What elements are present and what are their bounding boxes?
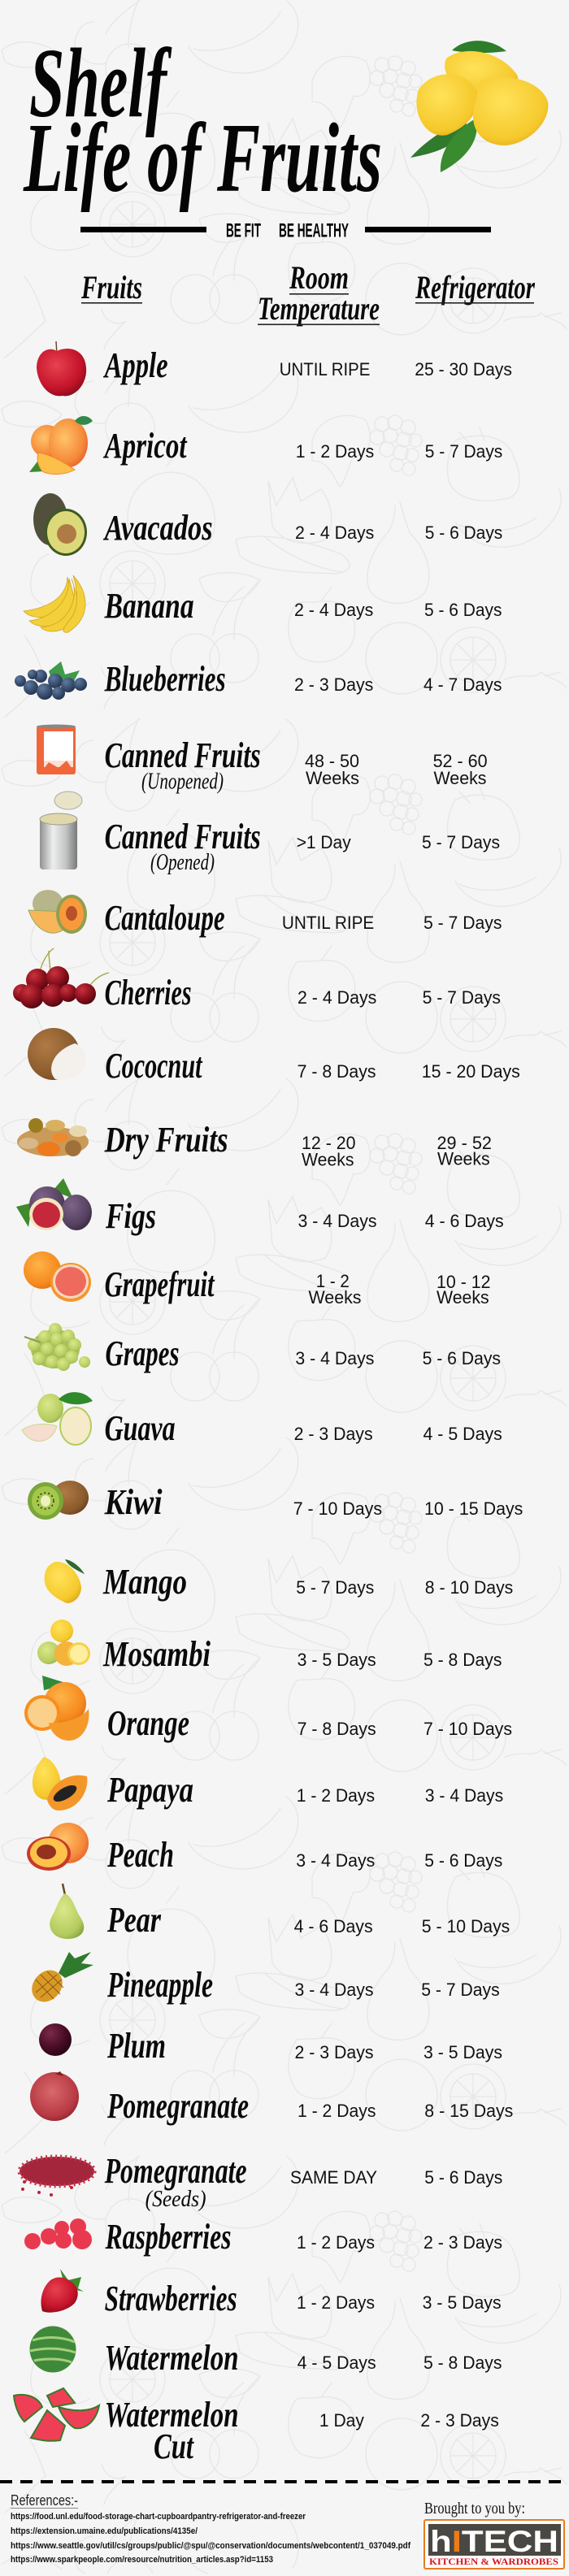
row: plum — [39, 2023, 502, 2066]
row: apple: 25 - 30 Days — [415, 359, 512, 379]
icon: peach — [27, 1823, 89, 1871]
row: banana — [24, 575, 502, 632]
row: coconut: Cococnut — [106, 1046, 203, 1086]
icon: grapefruit — [24, 1251, 91, 1302]
row: cherries: Cherries — [105, 973, 192, 1013]
row: mosambi: 3 - 5 Days — [298, 1650, 376, 1670]
row: dry fruits: 29 - 52 — [437, 1133, 492, 1153]
row: grapefruit: Grapefruit — [105, 1264, 215, 1304]
row: canned fruits opened: Canned Fruits — [105, 817, 261, 856]
column heading: room temperature: Room — [289, 259, 349, 296]
row: raspberries: 2 - 3 Days — [423, 2232, 502, 2253]
row: cherries: 2 - 4 Days — [298, 987, 376, 1008]
row: canned fruits unopened: (Unopened) — [141, 769, 224, 795]
row: pomegranate seeds: SAME DAY — [290, 2167, 377, 2188]
row: watermelon cut: 2 - 3 Days — [420, 2410, 499, 2431]
row: watermelon: 5 - 8 Days — [423, 2353, 502, 2373]
row: figs: Figs — [105, 1196, 156, 1236]
row: pear: 4 - 6 Days — [294, 1916, 373, 1936]
references: References:- — [11, 2492, 78, 2509]
icon: opened can — [40, 791, 82, 870]
row: orange: Orange — [107, 1703, 189, 1743]
row: guava: Guava — [105, 1408, 176, 1448]
icon: mosambi — [37, 1620, 90, 1666]
row: coconut: 15 - 20 Days — [422, 1061, 520, 1082]
references — [11, 2492, 410, 2565]
row: mosambi: 5 - 8 Days — [423, 1650, 502, 1670]
row: peach — [27, 1823, 502, 1875]
row: canned fruits unopened: Weeks — [306, 768, 359, 788]
title — [23, 28, 382, 213]
row: pomegranate seeds: Pomegranate — [104, 2151, 247, 2191]
logo: hitech: hITECH — [430, 2525, 558, 2558]
row: peach: 3 - 4 Days — [296, 1850, 375, 1871]
row: banana: Banana — [104, 586, 194, 626]
references: https://www.seattle.gov/util/cs/groups/public/@spu/@conservation/documents/webcontent/1_037049.pdf — [11, 2541, 410, 2551]
row: pomegranate seeds: 5 - 6 Days — [424, 2167, 502, 2188]
icon: orange — [24, 1676, 89, 1741]
row: coconut — [28, 1028, 520, 1086]
row: dry fruits — [17, 1118, 492, 1170]
brought to you by: Brought to you by: — [424, 2500, 525, 2517]
row: canned fruits opened: >1 Day — [297, 832, 351, 852]
icon: sealed can — [37, 725, 76, 774]
row: blueberries: 2 - 3 Days — [294, 674, 373, 695]
row: raspberries: 1 - 2 Days — [297, 2232, 375, 2253]
row: pineapple — [25, 1952, 500, 2008]
row: apple: Apple — [102, 345, 168, 385]
row: kiwi: Kiwi — [104, 1482, 163, 1522]
row: watermelon cut — [14, 2388, 499, 2466]
row: guava: 4 - 5 Days — [423, 1424, 502, 1444]
icon: apple — [37, 341, 86, 396]
row: guava: 2 - 3 Days — [294, 1424, 373, 1444]
column heading: room temperature — [258, 259, 380, 327]
icon: dry fruits — [17, 1118, 89, 1156]
icon: papaya — [33, 1757, 87, 1811]
row: grapefruit: 10 - 12 — [437, 1272, 491, 1292]
row: apricot: 1 - 2 Days — [296, 441, 374, 462]
row: grapefruit: Weeks — [309, 1287, 361, 1308]
icon: avocado — [33, 493, 87, 556]
row: canned fruits unopened: 48 - 50 — [305, 751, 359, 771]
row: orange: 7 - 10 Days — [423, 1719, 512, 1739]
references: https://food.unl.edu/food-storage-chart-cupboardpantry-refrigerator-and-freezer — [11, 2512, 306, 2522]
row: coconut: 7 - 8 Days — [298, 1061, 376, 1082]
row: avocados: 5 - 6 Days — [425, 523, 502, 543]
row: apricot: 5 - 7 Days — [425, 441, 502, 462]
row: papaya — [33, 1757, 503, 1811]
row: dry fruits: Dry Fruits — [104, 1120, 228, 1160]
row: cherries — [13, 948, 501, 1013]
row: mosambi — [37, 1620, 502, 1674]
title: Life of Fruits — [23, 103, 382, 213]
title: Shelf — [29, 28, 172, 138]
row: canned fruits unopened: 52 - 60 — [433, 751, 488, 771]
icon: green grapes — [24, 1323, 90, 1371]
icon: pear — [50, 1884, 84, 1939]
row: papaya: 3 - 4 Days — [425, 1785, 503, 1806]
row: pineapple: 5 - 7 Days — [421, 1980, 500, 2000]
row: papaya: 1 - 2 Days — [297, 1785, 375, 1806]
row: blueberries: 4 - 7 Days — [423, 674, 502, 695]
row: kiwi — [28, 1481, 523, 1522]
icon: cherries — [13, 948, 109, 1008]
icon: pomegranate — [30, 2071, 79, 2121]
row: dry fruits: Weeks — [302, 1149, 354, 1170]
row: canned fruits opened — [40, 791, 500, 875]
row: canned fruits opened: (Opened) — [150, 850, 215, 875]
row: watermelon cut: Cut — [154, 2426, 194, 2466]
row: banana: 2 - 4 Days — [294, 600, 373, 620]
row: figs — [16, 1178, 504, 1236]
row: pomegranate seeds: (Seeds) — [146, 2187, 206, 2212]
row: blueberries: Blueberries — [104, 659, 226, 699]
row: pear: Pear — [106, 1900, 162, 1940]
tagline with rules: BE FIT — [226, 219, 261, 242]
icon: mango — [45, 1559, 85, 1603]
row: cantaloupe: UNTIL RIPE — [282, 913, 374, 933]
row: guava — [22, 1392, 502, 1448]
row: raspberries — [24, 2217, 502, 2257]
icon: watermelon wedges — [14, 2388, 99, 2441]
row: canned fruits unopened — [37, 725, 488, 795]
row: pomegranate: 1 - 2 Days — [298, 2101, 376, 2121]
row: dry fruits: Weeks — [437, 1149, 490, 1169]
row: kiwi: 7 - 10 Days — [293, 1498, 382, 1519]
row: peach: 5 - 6 Days — [424, 1850, 502, 1871]
row: watermelon — [29, 2326, 502, 2378]
references: https://extension.umaine.edu/publications/4135e/ — [11, 2526, 198, 2536]
row: canned fruits unopened: Weeks — [434, 768, 486, 788]
row: pear: 5 - 10 Days — [422, 1916, 510, 1936]
row: grapefruit: 1 - 2 — [316, 1271, 350, 1291]
column heading: room temperature: Temperature — [258, 290, 380, 327]
row: mango: 5 - 7 Days — [296, 1577, 374, 1598]
row: blueberries — [15, 659, 502, 700]
row: pineapple: Pineapple — [106, 1965, 213, 2005]
row: strawberries: 3 - 5 Days — [423, 2292, 502, 2313]
tagline with rules — [80, 219, 491, 242]
logo: hitech: KITCHEN & WARDROBES — [429, 2556, 558, 2567]
row: pomegranate — [30, 2071, 513, 2126]
row: mango — [45, 1559, 513, 1603]
row: watermelon: 4 - 5 Days — [298, 2353, 376, 2373]
row: peach: Peach — [106, 1835, 174, 1875]
icon: apricot — [29, 416, 93, 475]
icon: mangoes hero — [410, 41, 548, 172]
row: mango: 8 - 10 Days — [425, 1577, 513, 1598]
row: cherries: 5 - 7 Days — [423, 987, 501, 1008]
icon: strawberry — [41, 2269, 84, 2313]
icon: plum — [39, 2023, 72, 2056]
row: orange — [24, 1676, 512, 1743]
row: watermelon: Watermelon — [105, 2338, 239, 2378]
icon: raspberries — [24, 2218, 92, 2249]
row: grapes: 3 - 4 Days — [295, 1348, 374, 1368]
row: mango: Mango — [102, 1562, 187, 1602]
row: pomegranate: Pomegranate — [106, 2086, 249, 2126]
row: apricot: Apricot — [102, 426, 188, 466]
row: strawberries: Strawberries — [105, 2279, 237, 2318]
row: mosambi: Mosambi — [102, 1634, 211, 1674]
row: strawberries — [41, 2269, 502, 2318]
row: grapes: Grapes — [106, 1334, 179, 1373]
row: watermelon cut: 1 Day — [319, 2410, 364, 2431]
row: avocados — [33, 493, 502, 556]
icon: kiwi — [28, 1481, 89, 1520]
row: canned fruits opened: 5 - 7 Days — [422, 832, 500, 852]
row: plum: 3 - 5 Days — [423, 2042, 502, 2062]
row: cantaloupe: 5 - 7 Days — [423, 913, 502, 933]
row: avocados: 2 - 4 Days — [295, 523, 374, 543]
row: grapes — [24, 1323, 501, 1373]
row: watermelon cut: Watermelon — [105, 2395, 239, 2435]
column heading: fruits: Fruits — [80, 269, 142, 306]
row: grapefruit — [24, 1251, 491, 1308]
row: figs: 4 - 6 Days — [425, 1211, 504, 1231]
icon: pineapple — [25, 1952, 93, 2008]
icon: figs — [16, 1178, 92, 1230]
row: pear — [50, 1884, 510, 1940]
tagline with rules: BE HEALTHY — [279, 219, 349, 242]
row: apple — [37, 341, 512, 396]
icon: blueberries — [15, 661, 87, 700]
row: pomegranate seeds — [20, 2151, 502, 2212]
row: kiwi: 10 - 15 Days — [424, 1498, 523, 1519]
row: cantaloupe: Cantaloupe — [105, 898, 225, 938]
icon: watermelon — [29, 2326, 76, 2373]
icon: bananas — [24, 575, 85, 632]
row: plum: Plum — [106, 2026, 166, 2066]
row: pomegranate: 8 - 15 Days — [424, 2101, 513, 2121]
icon: guava — [22, 1392, 93, 1445]
row: raspberries: Raspberries — [105, 2217, 231, 2257]
row: apple: UNTIL RIPE — [280, 359, 370, 379]
row: orange: 7 - 8 Days — [298, 1719, 376, 1739]
row: cantaloupe — [28, 890, 502, 938]
row: banana: 5 - 6 Days — [424, 600, 502, 620]
row: avocados: Avacados — [102, 508, 213, 548]
icon: pomegranate seeds — [20, 2157, 94, 2197]
row: dry fruits: 12 - 20 — [302, 1133, 356, 1153]
row: pineapple: 3 - 4 Days — [294, 1980, 374, 2000]
icon: coconut — [28, 1028, 86, 1080]
row: plum: 2 - 3 Days — [294, 2042, 374, 2062]
logo: hitech — [424, 2520, 564, 2569]
row: strawberries: 1 - 2 Days — [297, 2292, 375, 2313]
row: papaya: Papaya — [106, 1770, 193, 1810]
row: grapes: 5 - 6 Days — [423, 1348, 501, 1368]
row: apricot — [29, 416, 502, 475]
row: canned fruits unopened: Canned Fruits — [105, 735, 261, 775]
icon: cantaloupe — [28, 890, 87, 934]
row: grapefruit: Weeks — [437, 1287, 489, 1308]
references: https://www.sparkpeople.com/resource/nutrition_articles.asp?id=1153 — [11, 2555, 273, 2565]
row: figs: 3 - 4 Days — [298, 1211, 377, 1231]
